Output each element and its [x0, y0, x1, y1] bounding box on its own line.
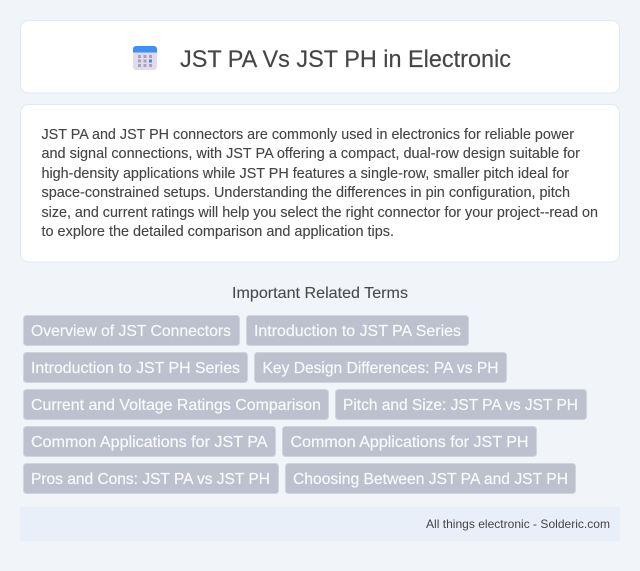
footer: All things electronic - Solderic.com — [426, 517, 610, 531]
tag — [24, 426, 276, 456]
title: JST PA Vs JST PH in Electronic — [180, 46, 511, 73]
icon: calendar grid — [133, 46, 157, 70]
description text: size, and current ratings will help you select the right connector for your project--read on — [42, 205, 598, 221]
tag: Introduction to JST PA Series — [254, 323, 461, 340]
tag: Overview of JST Connectors — [31, 323, 231, 340]
description text: space-constrained setups. Understanding the differences in pin configuration, pitch — [42, 185, 570, 201]
panel: description — [20, 104, 620, 262]
tag: Current and Voltage Ratings Comparison — [31, 397, 321, 414]
tag — [24, 316, 240, 346]
tag: Pros and Cons: JST PA vs JST PH — [31, 471, 270, 488]
description text: high-density applications while JST PH features a single-row, smaller pitch ideal for — [42, 166, 569, 182]
tag: Key Design Differences: PA vs PH — [262, 360, 498, 377]
heading: related terms: Important Related Terms — [232, 285, 408, 302]
tag — [286, 464, 576, 494]
tag: Common Applications for JST PH — [290, 434, 528, 451]
panel: related term tags — [24, 316, 586, 494]
description text — [42, 127, 598, 240]
description text: JST PA and JST PH connectors are commonly used in electronics for reliable power — [42, 127, 574, 143]
description text: and signal connections, with JST PA offering a compact, dual-row design suitable for — [42, 146, 580, 162]
footer — [20, 507, 620, 541]
tag — [254, 352, 506, 382]
title panel — [20, 20, 620, 93]
tag: Pitch and Size: JST PA vs JST PH — [343, 397, 578, 414]
tag: Common Applications for JST PA — [31, 434, 268, 451]
tag — [336, 390, 586, 420]
tag: Introduction to JST PH Series — [31, 360, 240, 377]
tag — [282, 426, 536, 456]
description text: to explore the detailed comparison and application tips. — [42, 224, 394, 240]
tag — [24, 352, 248, 382]
tag — [24, 390, 328, 420]
tag: Choosing Between JST PA and JST PH — [293, 471, 568, 488]
tag — [246, 316, 468, 346]
tag — [24, 464, 278, 494]
